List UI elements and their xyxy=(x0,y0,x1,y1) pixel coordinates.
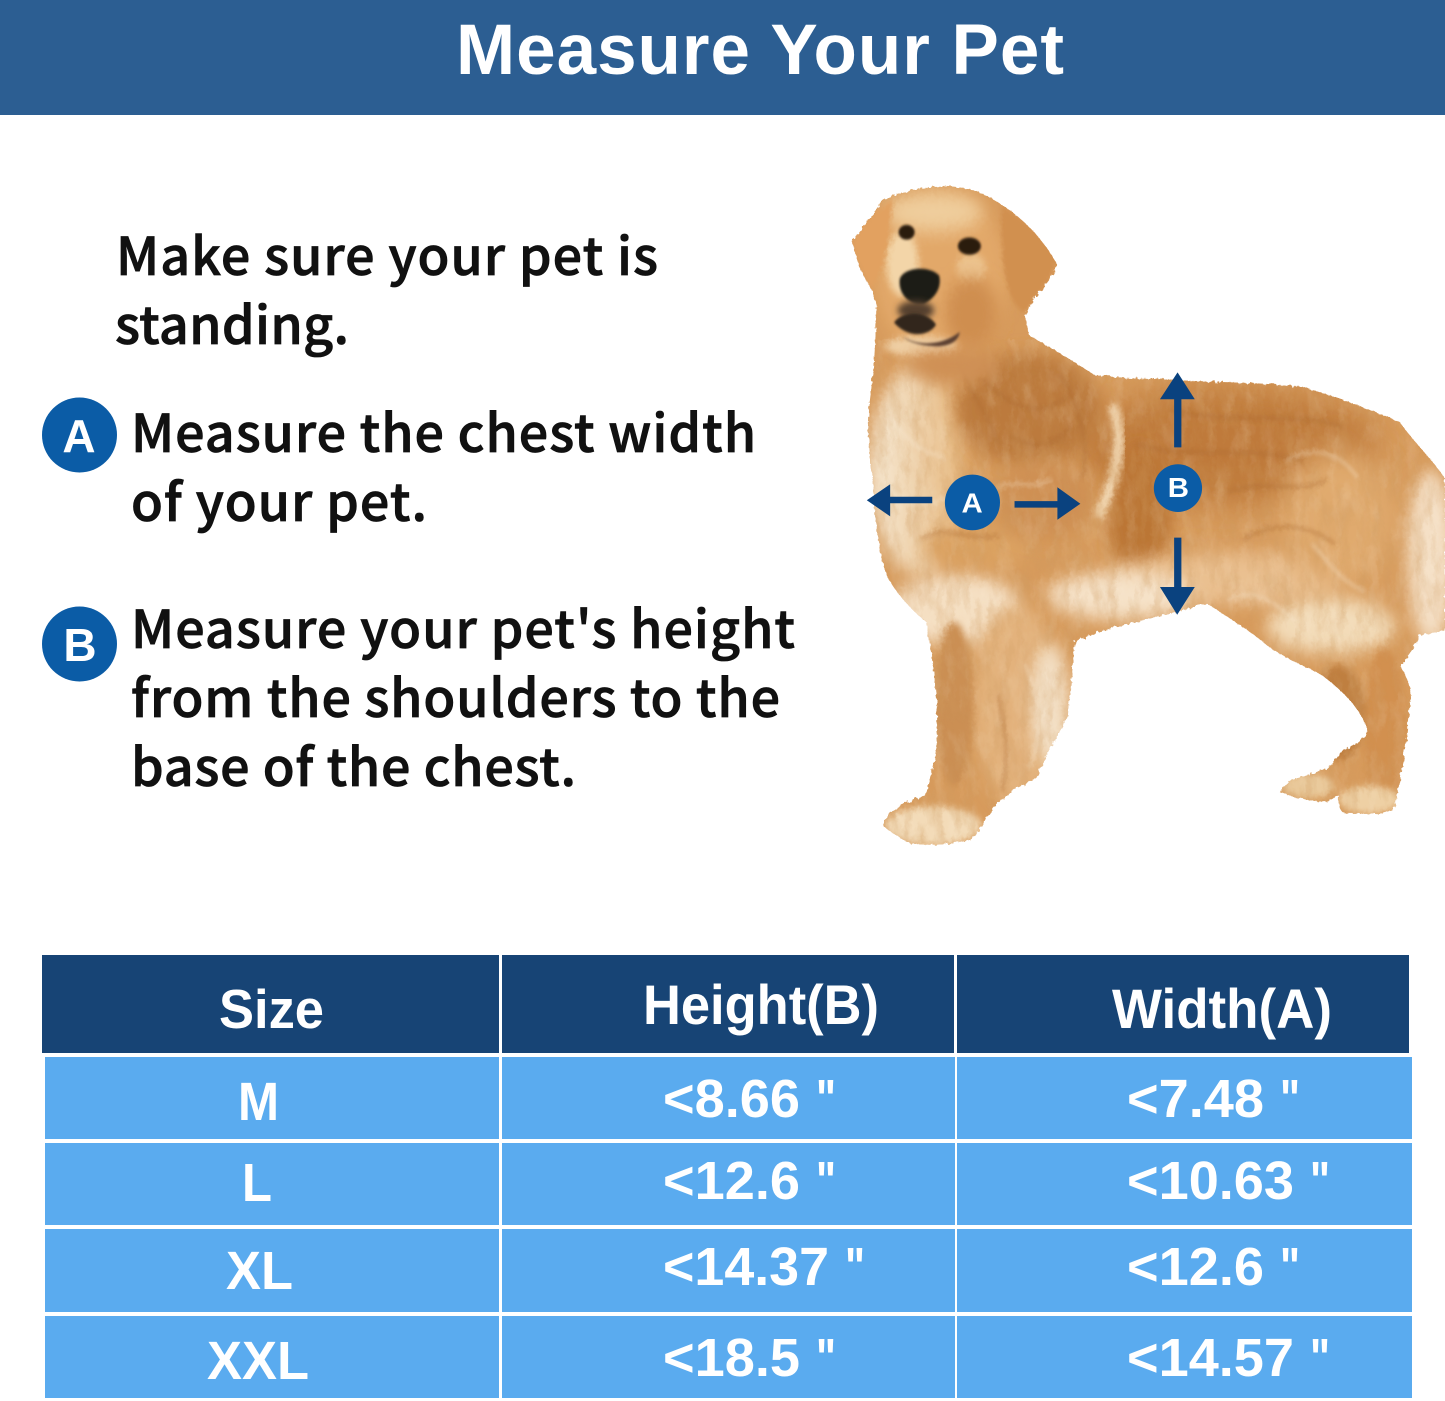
marker B xyxy=(1154,464,1202,512)
intro text: Make sure your pet is xyxy=(116,215,658,290)
dog head shading xyxy=(874,190,1008,383)
table header row: Width(A) xyxy=(1112,977,1332,1040)
dog left ear xyxy=(853,198,893,290)
fur strokes xyxy=(922,366,1343,791)
row XL: <12.6 xyxy=(1127,1237,1264,1297)
step B text xyxy=(131,588,795,801)
step A badge: A xyxy=(62,410,96,462)
size table xyxy=(42,955,1412,1398)
arrow: chest width left xyxy=(867,484,932,516)
row M: <8.66 xyxy=(663,1069,800,1129)
step B badge: B xyxy=(63,619,97,671)
row L: L xyxy=(242,1153,272,1213)
arrow: chest width right xyxy=(1015,487,1080,520)
dog right ear xyxy=(1001,205,1057,313)
row XL: " xyxy=(845,1237,865,1297)
step B text: Measure your pet's height xyxy=(131,588,795,663)
dog illustration with measurement markers xyxy=(845,175,1445,869)
step B badge xyxy=(42,606,117,682)
row M: M xyxy=(238,1072,279,1132)
row XL: XL xyxy=(226,1241,293,1301)
row M: " xyxy=(1280,1069,1300,1129)
row XXL xyxy=(45,1316,1412,1398)
icon: golden retriever xyxy=(845,175,1445,869)
step B text: base of the chest. xyxy=(131,726,576,801)
row XXL: " xyxy=(816,1328,836,1388)
row M: <7.48 xyxy=(1127,1069,1264,1129)
row XL: " xyxy=(1280,1237,1300,1297)
row XXL: <14.57 xyxy=(1127,1328,1294,1388)
intro text xyxy=(115,215,658,359)
marker A: A xyxy=(961,488,983,519)
table header row: Height(B) xyxy=(643,973,879,1036)
step A text xyxy=(131,392,756,536)
arrow: height up xyxy=(1160,372,1195,447)
icon: dog nose and mouth xyxy=(894,269,960,346)
row M: " xyxy=(816,1069,836,1129)
title: Measure Your Pet xyxy=(456,11,1064,90)
row XXL: XXL xyxy=(207,1331,309,1391)
arrow: height down xyxy=(1160,538,1195,615)
header banner xyxy=(0,0,1445,115)
row L: <10.63 xyxy=(1127,1151,1294,1211)
row L: <12.6 xyxy=(663,1151,800,1211)
marker A xyxy=(945,475,1000,530)
marker B: B xyxy=(1168,473,1189,504)
table header row xyxy=(42,955,1409,1053)
row XXL: <18.5 xyxy=(663,1328,800,1388)
icon: dog eyes xyxy=(899,225,981,255)
row XL xyxy=(45,1229,1412,1312)
row L: " xyxy=(816,1151,836,1211)
table header row: Size xyxy=(219,978,324,1040)
row M xyxy=(45,1057,1412,1139)
instructions text block xyxy=(42,215,795,801)
row L: " xyxy=(1310,1151,1330,1211)
row XXL: " xyxy=(1310,1328,1330,1388)
step A text: of your pet. xyxy=(131,461,427,536)
row XL: <14.37 xyxy=(663,1237,829,1297)
step A badge xyxy=(42,398,117,472)
intro text: standing. xyxy=(115,284,349,359)
step B text: from the shoulders to the xyxy=(131,657,780,732)
step A text: Measure the chest width xyxy=(131,392,756,467)
row L xyxy=(45,1143,1412,1225)
